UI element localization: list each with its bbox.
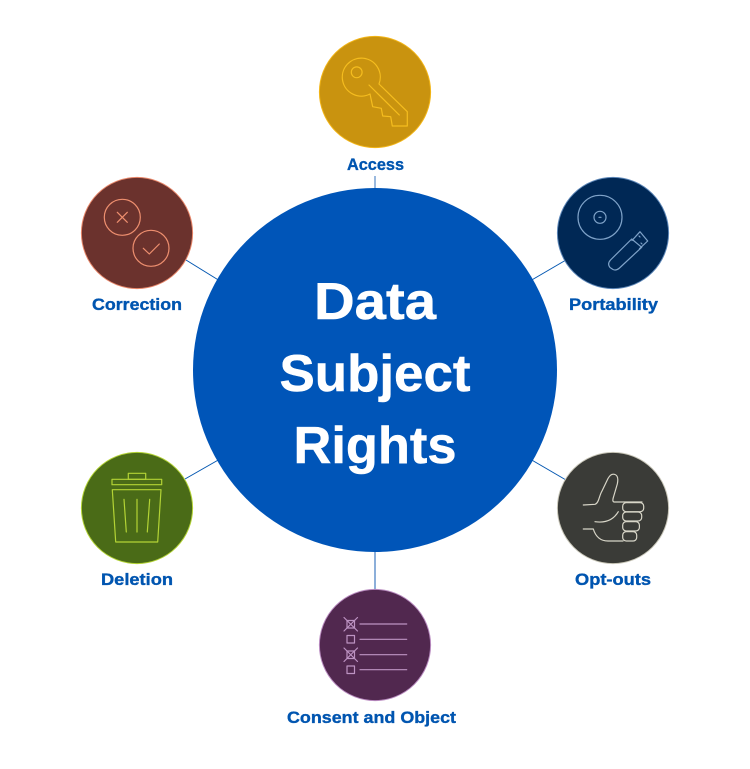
icon: key xyxy=(342,58,407,126)
label: Deletion: Deletion xyxy=(101,571,173,589)
node: Opt-outs xyxy=(557,452,669,589)
label: Consent and Object: Consent and Object xyxy=(287,709,457,727)
label: Portability: Portability xyxy=(569,296,659,314)
node: Deletion xyxy=(81,452,193,589)
node: Portability xyxy=(557,177,669,314)
connector: Access xyxy=(374,176,376,192)
connector: Portability xyxy=(530,260,566,281)
icon: checklist xyxy=(344,618,407,674)
connector: Correction xyxy=(186,260,220,281)
central hub: Data Subject Rights: Data xyxy=(314,273,437,331)
node: Access xyxy=(319,36,431,174)
connector: Consent and Object xyxy=(374,550,376,590)
label: Opt-outs: Opt-outs xyxy=(575,571,651,589)
connector: Opt-outs xyxy=(530,459,566,480)
central hub: Data Subject Rights: Rights xyxy=(294,417,456,475)
central hub: Data Subject Rights: Subject xyxy=(280,345,470,403)
central hub: Data Subject Rights xyxy=(193,188,557,552)
label: Access: Access xyxy=(347,156,404,174)
connector: Deletion xyxy=(185,459,220,479)
node: Correction xyxy=(81,177,193,314)
icon: disc and USB drive xyxy=(578,195,648,270)
icon: thumbs up xyxy=(583,474,644,541)
node: Consent and Object xyxy=(287,589,457,727)
icon: cross and check xyxy=(104,199,169,266)
icon: trash can xyxy=(112,473,162,542)
label: Correction: Correction xyxy=(92,296,182,314)
